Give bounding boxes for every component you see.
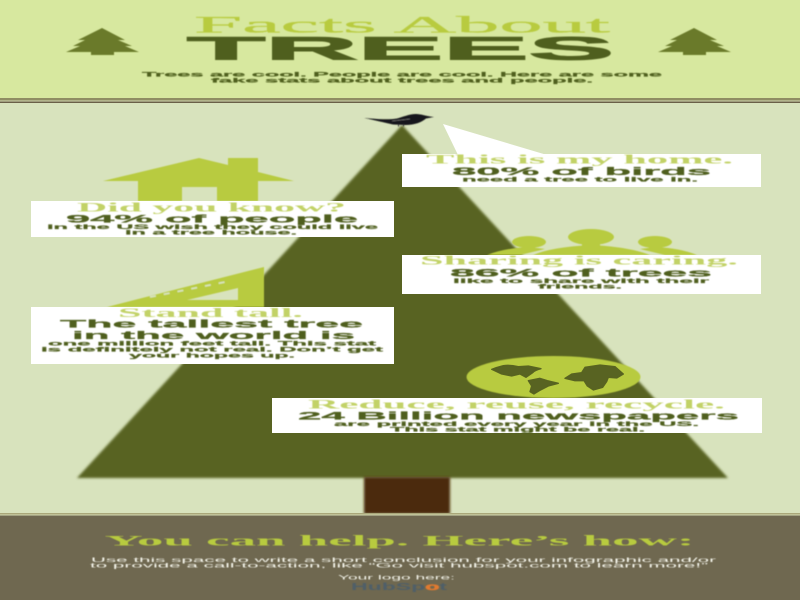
icon: pine tree right — [658, 28, 731, 55]
icon: people — [487, 229, 697, 255]
panel: reduce reuse recycle: Reduce, reuse, recycle. — [308, 398, 725, 412]
logo: HubSpot: HubSp o t — [351, 582, 449, 593]
icon: globe — [466, 356, 640, 398]
panel: did you know: Did you know? — [77, 200, 346, 214]
panel: did you know: 94% of people — [66, 214, 358, 226]
icon: pine tree left — [66, 28, 139, 55]
panel: stand tall: The tallest tree — [60, 318, 363, 330]
panel: stand tall: one million feet tall. This stat — [48, 340, 379, 348]
panel: reduce reuse recycle: This stat might be real. — [390, 426, 645, 434]
panel: reduce reuse recycle — [272, 398, 762, 434]
title: Facts About: Facts About — [194, 12, 612, 38]
panel: main background — [0, 100, 800, 515]
subtitle: Trees are cool. People are cool. Here are some — [142, 72, 663, 78]
icon: bird — [364, 114, 434, 126]
panel: sharing is caring: friends. — [538, 284, 622, 290]
tree trunk — [364, 477, 450, 514]
panel: stand tall: in the world is — [72, 330, 355, 342]
footer text: Your logo here: — [338, 574, 455, 582]
panel: this is my home: This is my home. — [426, 152, 733, 166]
panel: reduce reuse recycle: are printed every year in the US. — [334, 421, 699, 428]
panel: stand tall: Stand tall. — [118, 306, 303, 320]
panel: did you know: in the US wish they could live — [47, 224, 379, 231]
footer text: to provide a call-to-action, like “Go visit hubspot.com to learn more!” — [90, 562, 708, 570]
panel: sharing is caring: 86% of trees — [450, 268, 712, 280]
panel: did you know: in a tree house. — [125, 230, 297, 236]
icon: ruler triangle — [107, 267, 264, 307]
panel: sharing is caring: like to share with their — [453, 278, 710, 285]
panel: stand tall — [31, 306, 394, 364]
panel: stand tall: your hopes up. — [129, 352, 295, 360]
title: TREES: TREES — [187, 31, 614, 67]
panel: stand tall: is definitely not real. Don’t get — [41, 346, 386, 354]
footer heading: You can help. Here’s how: — [104, 534, 694, 550]
panel: this is my home: need a tree to live in. — [462, 176, 698, 184]
panel: this is my home: 80% of birds — [452, 166, 711, 178]
panel: did you know — [31, 200, 394, 237]
panel: sharing is caring — [402, 254, 761, 294]
subtitle — [142, 72, 663, 84]
panel: reduce reuse recycle: 24 Billion newspapers — [298, 410, 739, 422]
subtitle: fake stats about trees and people. — [211, 78, 593, 84]
panel: header — [0, 0, 800, 103]
panel: this is my home — [402, 152, 761, 187]
callout pointer — [443, 124, 547, 155]
icon: tree house — [103, 158, 294, 201]
footer text: Use this space to write a short conclusion for your infographic and/or — [91, 557, 719, 564]
panel: footer — [0, 513, 800, 600]
footer text — [90, 557, 719, 582]
large tree crown — [77, 125, 728, 478]
panel: sharing is caring: Sharing is caring. — [420, 254, 738, 268]
